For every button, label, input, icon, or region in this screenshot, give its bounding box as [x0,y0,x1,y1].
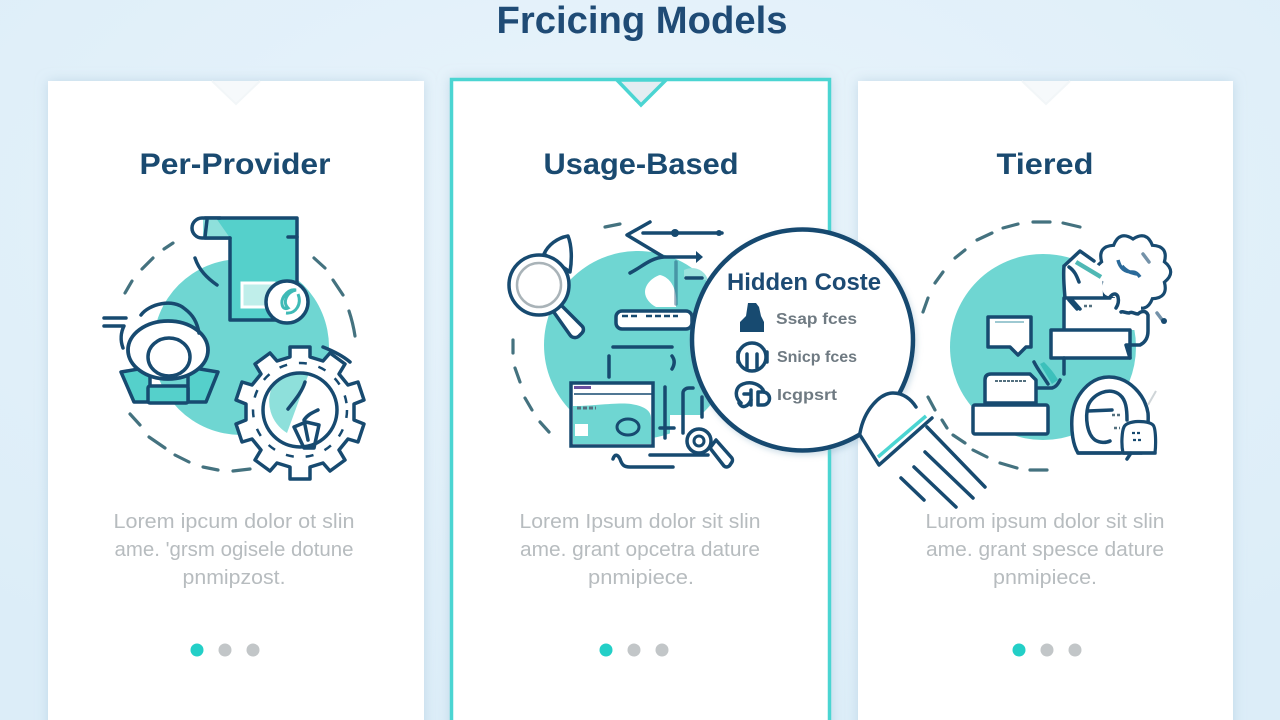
icon: gear cloud [1095,236,1171,324]
flow arrows [627,222,722,273]
card notch [617,80,666,105]
card background [452,80,830,720]
card notch [1022,81,1070,104]
row: shop fees [738,343,857,371]
description text: Lorem Ipsum dolor sit slin [520,511,760,533]
icon: bars [609,347,702,438]
pagination dots [1012,644,1082,656]
description text: pnmipiece. [993,567,1097,589]
description text: pnmipzost. [182,567,286,589]
icon: document scroll [192,218,308,323]
icon: headset badge [738,343,767,371]
card background [858,81,1233,720]
pagination dots [190,644,260,656]
row: shop fees: Snicp fces [777,349,857,366]
row: setup fees: Ssap fces [776,311,857,328]
callout heading: Hidden Coste [727,269,881,296]
heading: usage-based: Usage-Based [544,148,738,181]
icon: wrench [613,429,732,467]
magnifier lens [692,230,913,450]
panel: usage-based [452,80,830,720]
magnifier handle [860,393,985,507]
icon: upper stack [1051,251,1148,374]
description text [520,511,760,589]
panel: per-provider [48,81,424,720]
icon: tag [616,262,708,329]
description text: Lorem ipcum dolor ot slin [114,511,354,533]
description text: ame. grant opcetra dature [520,539,760,561]
heading: per-provider: Per-Provider [140,148,331,181]
icon: small magnifier [509,236,583,338]
icon: support person [1072,377,1156,459]
title: Frcicing Models [496,0,788,42]
card notch [212,81,260,104]
panel: tiered [858,81,1233,720]
row: support: Icgpsrt [777,387,838,404]
icon: gear [236,347,364,479]
row: setup fees [740,303,857,332]
illustration: per-provider [104,218,364,479]
icon: building [740,303,764,332]
icon: speech card [988,317,1031,355]
illustration: usage-based [509,222,732,470]
card background [48,81,424,720]
icon: browser window [571,383,653,446]
icon: lower stack [973,362,1060,434]
callout: hidden costs magnifier [692,230,985,507]
description text: pnmipiece. [588,567,694,589]
row: support [736,383,838,407]
description text: ame. grant spesce dature [926,539,1164,561]
description text [114,511,354,589]
heading: tiered: Tiered [996,148,1094,181]
description text: ame. 'grsm ogisele dotune [114,539,354,561]
description text [926,511,1164,589]
description text: Lurom ipsum dolor sit slin [926,511,1164,533]
icon: person [104,303,218,403]
icon: support headset [736,383,770,407]
pagination dots [600,644,668,656]
illustration: tiered [923,222,1171,470]
